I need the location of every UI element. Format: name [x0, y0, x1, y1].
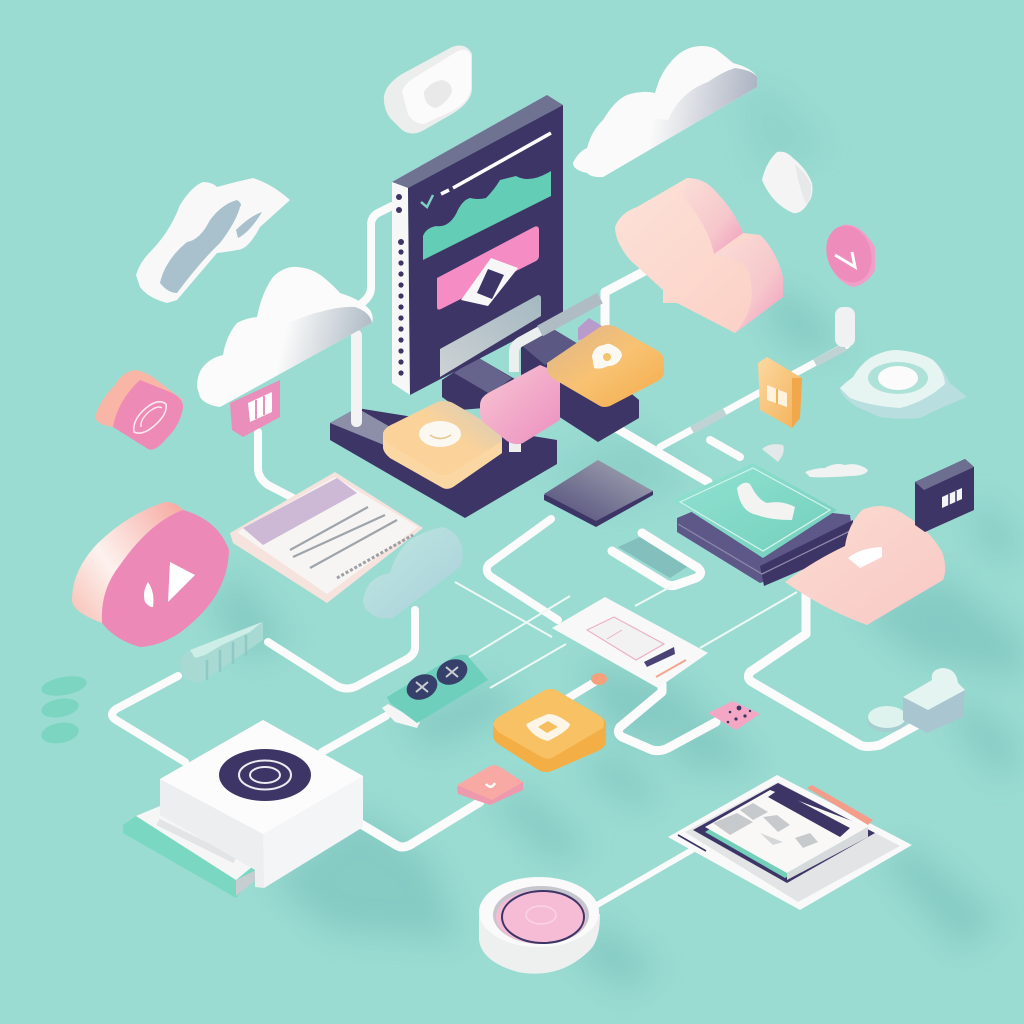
tower screen: [408, 105, 563, 395]
rear base platform: [442, 330, 639, 442]
cloud: mint small: [363, 527, 463, 618]
cable: plate to card: [487, 519, 558, 620]
post: white end cap: [835, 307, 855, 347]
screen header line: [441, 133, 551, 194]
egg icon: [592, 344, 622, 369]
cable: box to pink tag: [336, 802, 480, 847]
cloud: peach: [615, 178, 783, 333]
icon: mint device with two dials: [382, 654, 488, 728]
translucent glass panel: [440, 295, 541, 377]
cable: cloud to mint squiggle: [268, 610, 415, 688]
box top: [160, 720, 363, 834]
icon: mint squiggle: [180, 622, 263, 683]
knob: orange: [591, 673, 607, 685]
cloud: peach pillow: [785, 506, 945, 625]
cloud: left large: [197, 267, 373, 407]
tower base platform: [330, 408, 557, 518]
cable: tag to paper: [258, 432, 295, 499]
screen area chart: [423, 171, 551, 260]
cable: small loop: [612, 533, 701, 586]
panel: paper document: [230, 472, 423, 603]
dark header bar: [768, 790, 850, 837]
icon: teal disc: [840, 350, 967, 419]
tower side: [392, 182, 410, 395]
cable: pillow to right plug: [748, 592, 922, 746]
panel: green layered stack: [673, 463, 853, 586]
lilac tab: [578, 318, 602, 340]
orange key left: [383, 401, 502, 489]
chevron glyph: [848, 547, 882, 568]
tower top edge: [392, 95, 563, 188]
panel: tablet document: [668, 775, 912, 910]
icon: dotted pink tag: [708, 701, 760, 730]
cloud: small blob: [762, 152, 812, 213]
small white dome: [762, 444, 784, 462]
check icon: [737, 483, 795, 520]
cable: box to squiggle: [112, 676, 185, 762]
icon: orange square: [493, 689, 606, 772]
cloud: white squircle top: [384, 46, 472, 134]
pipe grey couplers: [692, 347, 845, 430]
cloud: left squiggle: [136, 178, 290, 303]
icon: mint stack: [40, 673, 88, 746]
screen pink banner: [437, 226, 539, 310]
screen diamond icon: [461, 258, 518, 306]
panel: white box with target: [123, 720, 363, 898]
pink cube connector: [480, 365, 560, 452]
dark plate: [544, 460, 653, 527]
network cables: [112, 206, 922, 905]
icon: right plug: [867, 668, 965, 733]
cable: tower to cloud: [362, 206, 392, 303]
glass connector arm: [514, 298, 600, 372]
small white cloud: [805, 464, 868, 477]
orange key right: [547, 325, 664, 407]
cable: peach to pipes: [605, 272, 643, 325]
cable: ring to document: [597, 850, 692, 905]
tag: pink small: [457, 765, 523, 805]
smile icon: [419, 421, 461, 447]
panel: white card with wireframe: [552, 597, 708, 688]
box drawer: [123, 806, 258, 898]
icon: pink circle: [819, 220, 879, 288]
cable: base to stack connection: [616, 428, 708, 482]
screen check mark: [421, 195, 433, 207]
loop interior shading: [618, 537, 687, 578]
cable: box to mint device: [322, 716, 386, 752]
cable: orange tag stem: [565, 680, 598, 700]
cable: upper right pipes: [660, 345, 847, 447]
target icon: [219, 749, 311, 801]
thin guide lines: [455, 582, 797, 688]
icon: ring button: [479, 877, 600, 974]
icon: dark cube: [915, 459, 974, 532]
cloud: top right: [573, 46, 757, 177]
salmon bar: [807, 785, 873, 825]
icon: big pink play pill: [72, 502, 229, 647]
tag: left pink with white bars: [230, 380, 280, 437]
icon: orange tag: [758, 357, 802, 428]
soft cast shadows: [210, 90, 1024, 990]
cable: card to dotted tag: [618, 684, 716, 751]
icon: pink rounded cube: [95, 370, 183, 450]
white post: [351, 330, 362, 427]
panel: central server tower: [330, 95, 664, 518]
